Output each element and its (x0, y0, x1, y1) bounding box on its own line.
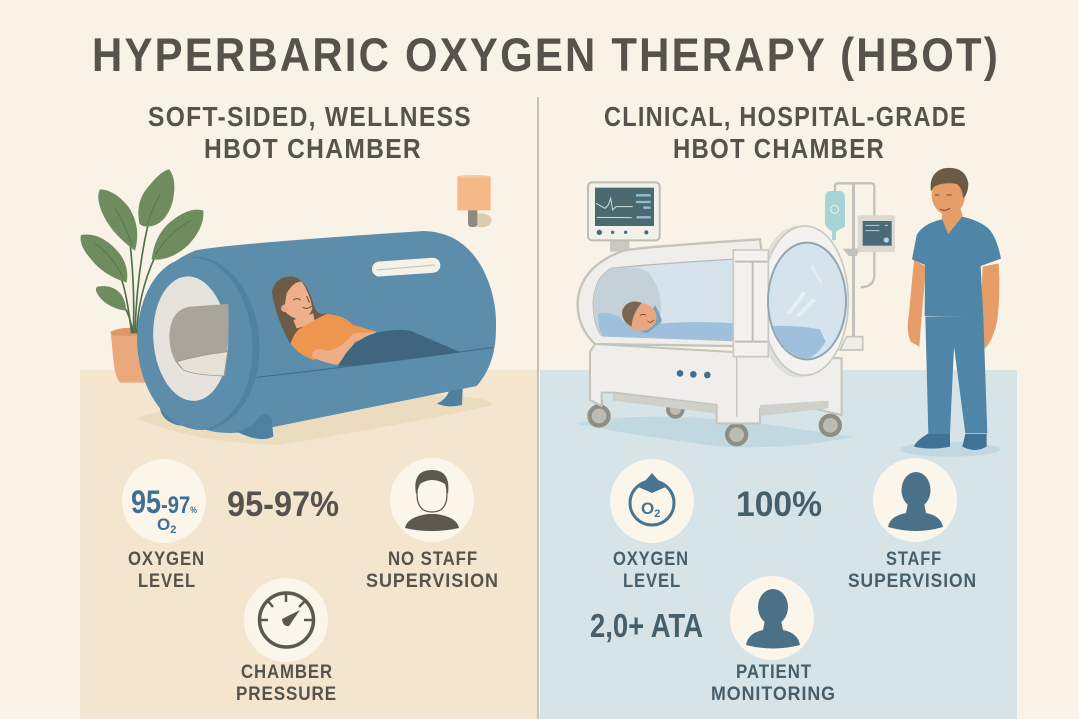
icon: person no staff (390, 458, 474, 542)
label: chamber pressure (236, 662, 337, 705)
label: patient monitoring (711, 662, 836, 705)
label: chamber pressure: CHAMBER (241, 662, 333, 683)
label: chamber pressure: PRESSURE (236, 684, 337, 705)
icon: pressure gauge (244, 578, 328, 662)
panel: clinical metrics (590, 458, 977, 705)
heading: soft-sided chamber: SOFT-SIDED, WELLNESS (148, 101, 472, 132)
stat: oxygen level: 95-97% (227, 485, 339, 524)
icon: chamber body (578, 239, 773, 347)
label: oxygen level: OXYGEN (613, 549, 689, 570)
icon: patient in chamber (621, 300, 662, 333)
panel: right floor (540, 370, 1017, 719)
heading: clinical chamber: CLINICAL, HOSPITAL-GRADE (604, 101, 967, 132)
illustration: clinical chamber scene (575, 168, 1001, 457)
label: staff supervision (848, 549, 977, 592)
stat: oxygen 100%: 100% (736, 485, 822, 524)
label: staff supervision: SUPERVISION (848, 571, 977, 592)
label: oxygen level: LEVEL (623, 571, 681, 592)
icon: chamber rear foot (437, 383, 463, 406)
icon: wall lamp (457, 175, 492, 227)
floor shadow (136, 395, 493, 445)
icon: chamber front foot (237, 414, 273, 439)
icon: clinician (908, 168, 1001, 450)
label: oxygen level: OXYGEN (128, 549, 205, 570)
label: oxygen level (128, 549, 205, 592)
icon: staff person (873, 458, 957, 542)
panel: soft-sided metrics (122, 458, 499, 705)
icon: patient monitoring person (730, 576, 814, 660)
icon: wall monitor (588, 182, 660, 252)
icon: door and porthole (733, 226, 863, 378)
heading: soft-sided chamber (148, 101, 472, 164)
icon: oxygen ring (610, 459, 694, 543)
label: patient monitoring: PATIENT (736, 662, 812, 683)
panel: left floor (80, 370, 537, 719)
illustration: soft-sided chamber scene (81, 169, 496, 445)
label: no staff supervision (366, 549, 499, 592)
heading: soft-sided chamber: HBOT CHAMBER (204, 133, 422, 164)
icon: oxygen ring: O (641, 499, 654, 518)
icon: oxygen 95-97 (122, 459, 206, 543)
icon: oxygen ring: 2 (654, 508, 660, 520)
floor shadows (575, 417, 1000, 457)
icon: potted plant (81, 169, 203, 383)
label: no staff supervision: NO STAFF (388, 549, 478, 570)
icon: oxygen 95-97: 2 (170, 524, 176, 536)
stat: pressure 2,0+ ATA: 2,0+ ATA (590, 607, 703, 644)
icon: IV pole and bag (825, 183, 874, 343)
icon: chamber rim (131, 253, 265, 434)
icon: oxygen 95-97: O (157, 515, 170, 534)
icon: chamber base (590, 344, 842, 423)
heading: clinical chamber (604, 101, 967, 164)
icon: chamber handle (372, 257, 441, 277)
label: patient monitoring: MONITORING (711, 684, 836, 705)
label: staff supervision: STAFF (886, 549, 942, 570)
icon: chamber interior (169, 304, 229, 377)
label: no staff supervision: SUPERVISION (366, 571, 499, 592)
heading: clinical chamber: HBOT CHAMBER (673, 133, 885, 164)
icon: small device (858, 215, 895, 252)
label: oxygen level (613, 549, 689, 592)
icon: wheels (587, 400, 842, 446)
label: oxygen level: LEVEL (138, 571, 196, 592)
icon: reclining woman (272, 277, 460, 367)
icon: chamber body (137, 231, 496, 433)
icon: oxygen 95-97: 95-97% (131, 484, 197, 520)
